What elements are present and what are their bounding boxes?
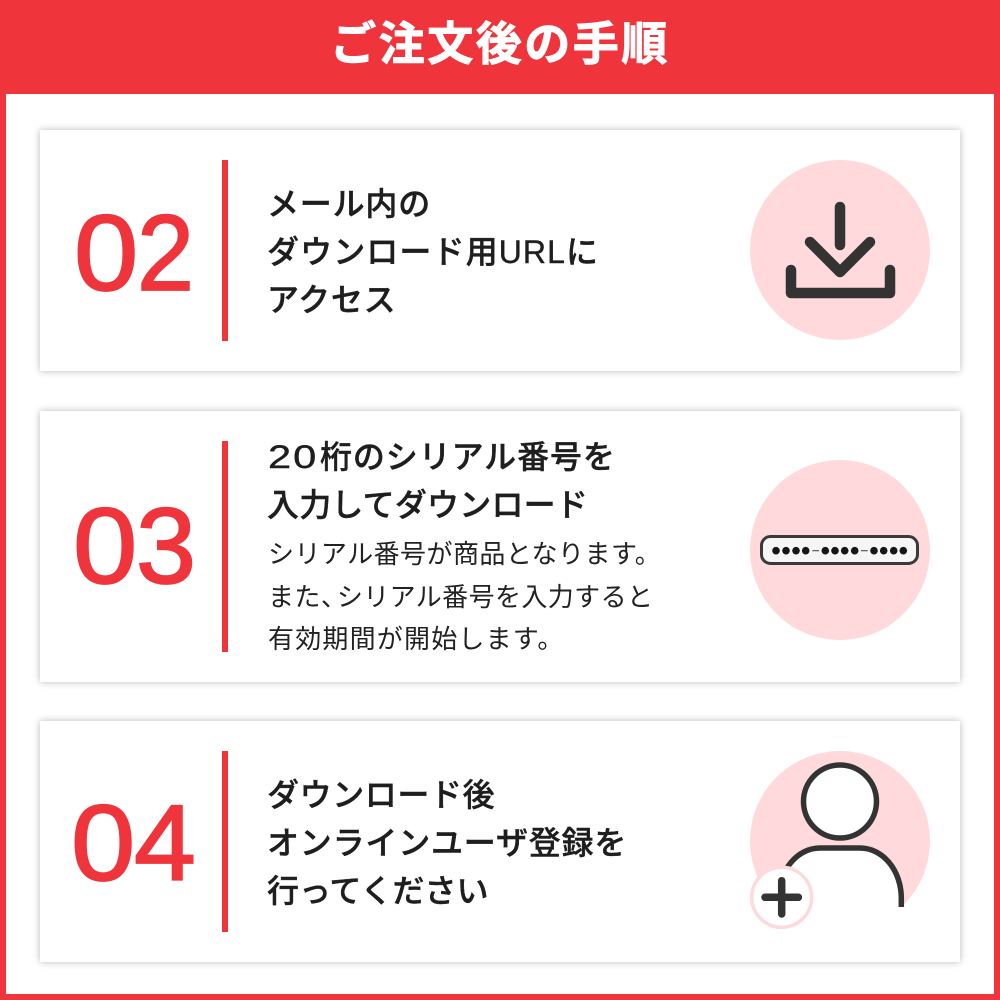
- step number 02: 2: [137, 192, 194, 312]
- step 04 heading: オンラインユーザ登録を: [267, 825, 627, 861]
- step 02 heading: [267, 186, 599, 318]
- step 02 heading: ダウンロード用URLに: [267, 234, 599, 270]
- icon: add user: [750, 751, 930, 931]
- panel: step 04: [40, 721, 960, 962]
- icon: serial number field: [750, 460, 930, 640]
- step 03 description: シリアル番号が商品となります。: [268, 539, 661, 569]
- title banner: ご注文後の手順: [330, 18, 670, 70]
- step 02 heading: メール内の: [267, 186, 431, 222]
- step number 02: 0: [74, 192, 138, 312]
- step 04 heading: [267, 777, 627, 909]
- step number 04: 0: [71, 782, 135, 903]
- step number 03: 0: [73, 485, 137, 606]
- title banner: [0, 0, 1000, 94]
- step 03 heading: [267, 439, 616, 523]
- step number 04: [71, 782, 196, 903]
- divider bar: [222, 751, 228, 932]
- step 04 heading: 行ってください: [267, 873, 488, 909]
- divider bar: [222, 441, 228, 652]
- step 03 description: また、シリアル番号を入力すると: [268, 582, 653, 612]
- icon: download: [750, 160, 930, 340]
- step 03 heading: 桁のシリアル番号を: [320, 439, 616, 475]
- step 02 heading: アクセス: [267, 282, 396, 318]
- step 03 description: [268, 539, 661, 654]
- step 03 description: 有効期間が開始します。: [268, 624, 565, 654]
- panel: step 02: [40, 130, 960, 371]
- step 04 heading: ダウンロード後: [267, 777, 495, 813]
- step number 04: 4: [134, 782, 196, 903]
- divider bar: [222, 160, 228, 341]
- panel: step 03: [40, 411, 960, 682]
- step 03 heading: 入力してダウンロード: [267, 487, 588, 523]
- step number 02: [74, 192, 194, 312]
- step number 03: 3: [136, 485, 196, 606]
- step number 03: [73, 485, 196, 606]
- step 03 heading: 20: [268, 439, 318, 475]
